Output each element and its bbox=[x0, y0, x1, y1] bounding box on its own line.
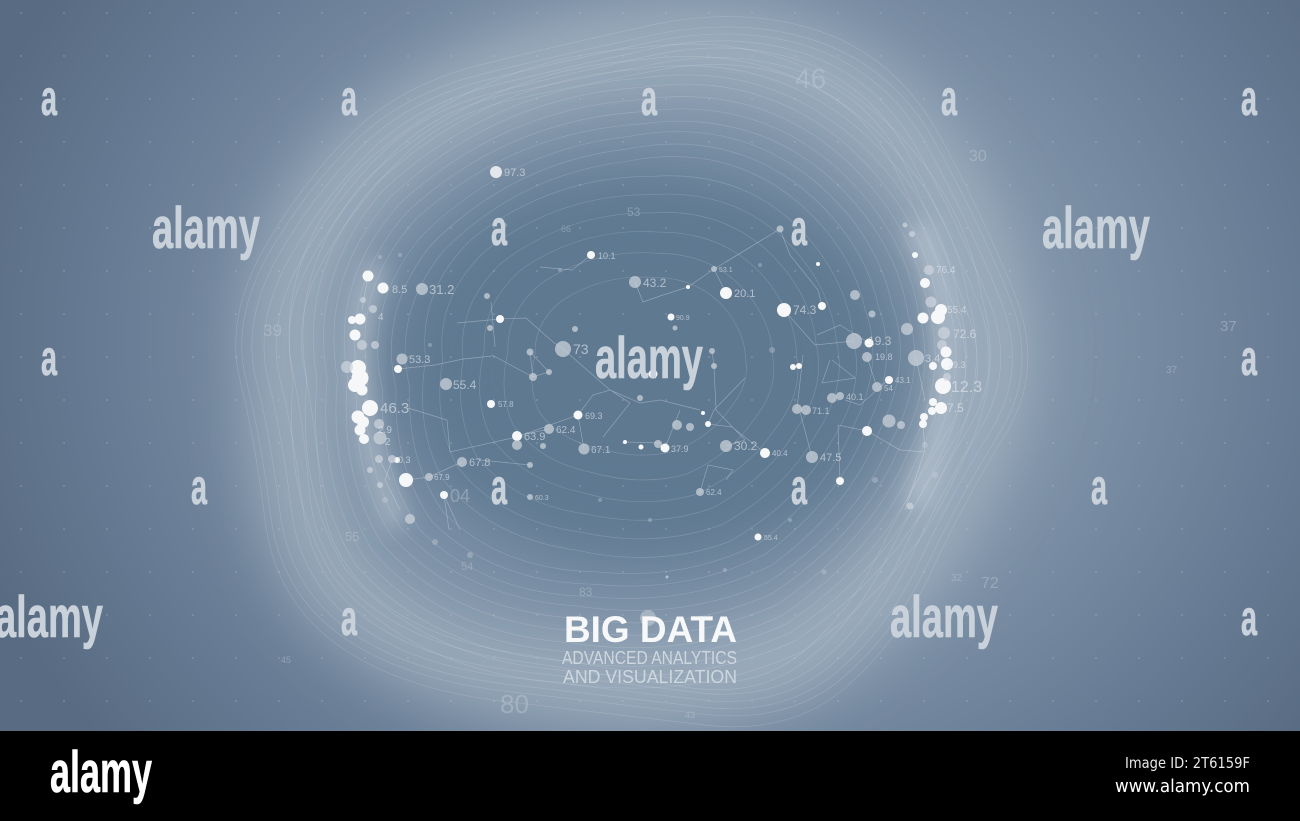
watermarks: a bbox=[1241, 70, 1258, 126]
watermarks: a bbox=[1241, 330, 1258, 386]
right arc node cluster: 72.6 bbox=[953, 327, 977, 341]
watermarks: alamy bbox=[1042, 196, 1150, 261]
faint floating numbers: 04 bbox=[450, 486, 470, 506]
contour lines bbox=[236, 16, 1028, 727]
left arc node cluster bbox=[341, 253, 411, 503]
right arc node cluster: 12.3 bbox=[951, 379, 982, 396]
watermarks bbox=[0, 70, 1258, 650]
central data nodes with values: 57.8 bbox=[498, 400, 514, 409]
central data nodes with values: 30.2 bbox=[734, 439, 758, 453]
subtitle: AND VISUALIZATION bbox=[563, 667, 737, 687]
right arc node cluster: 55.4 bbox=[947, 305, 967, 316]
watermarks: a bbox=[1241, 590, 1258, 646]
faint floating numbers: 53 bbox=[627, 205, 641, 219]
left arc node cluster: 2.9 bbox=[378, 425, 392, 436]
central data nodes with values: 40.4 bbox=[772, 449, 788, 458]
central data nodes with values: 63.9 bbox=[524, 431, 545, 443]
central data nodes with values: 19.8 bbox=[875, 352, 893, 362]
right arc node cluster: 7.5 bbox=[947, 401, 964, 415]
faint floating numbers: 43 bbox=[685, 710, 695, 720]
faint floating numbers: 45 bbox=[281, 655, 291, 665]
faint floating numbers: 66 bbox=[561, 224, 571, 234]
central data nodes with values: 60.3 bbox=[535, 495, 549, 502]
watermarks: a bbox=[491, 459, 508, 515]
central data nodes with values: 43.2 bbox=[643, 276, 667, 290]
left arc node cluster: 0.3 bbox=[398, 455, 411, 465]
central data nodes with values bbox=[394, 166, 940, 578]
watermarks: alamy bbox=[152, 196, 260, 261]
central data nodes with values: 53.3 bbox=[409, 354, 430, 366]
central data nodes with values: 71.1 bbox=[812, 406, 830, 416]
bright glowing ring bbox=[289, 47, 990, 685]
subtitle: ADVANCED ANALYTICS bbox=[562, 648, 737, 668]
central data nodes with values: 3.4 bbox=[925, 353, 940, 365]
watermarks: a bbox=[191, 459, 208, 515]
central data nodes with values: 90.9 bbox=[676, 315, 690, 322]
footer bar bbox=[0, 731, 1300, 821]
faint floating numbers: 30 bbox=[969, 148, 987, 165]
central data nodes with values: 97.3 bbox=[504, 167, 525, 179]
faint floating numbers bbox=[263, 63, 1237, 720]
central data nodes with values: 20.1 bbox=[734, 288, 755, 300]
left arc node cluster: 4 bbox=[378, 312, 384, 323]
faint floating numbers: 46 bbox=[795, 63, 826, 94]
faint floating numbers: 37 bbox=[1220, 318, 1237, 335]
subtitle bbox=[562, 648, 737, 687]
watermarks: a bbox=[941, 70, 958, 126]
central data nodes with values: 10.1 bbox=[598, 251, 616, 261]
left arc node cluster: 2 bbox=[385, 437, 391, 448]
central data nodes with values: 67.9 bbox=[434, 473, 450, 482]
central data nodes with values: 47.5 bbox=[820, 452, 841, 464]
footer bar: www.alamy.com bbox=[1115, 776, 1250, 797]
faint floating numbers: 55 bbox=[345, 529, 359, 544]
central data nodes with values: 53.1 bbox=[719, 267, 733, 274]
central data nodes with values: 40.1 bbox=[846, 392, 864, 402]
central data nodes with values: 54 bbox=[884, 384, 893, 393]
central data nodes with values: 37.9 bbox=[671, 444, 689, 454]
right arc node cluster: 29.3 bbox=[948, 360, 966, 370]
central data nodes with values: 55.4 bbox=[764, 535, 778, 542]
footer bar: alamy bbox=[50, 740, 152, 805]
footer bar: Image ID: 2T6159F bbox=[1125, 754, 1250, 772]
central data nodes with values: 43.1 bbox=[895, 376, 911, 385]
central data nodes with values: 55.4 bbox=[453, 378, 477, 392]
faint floating numbers: 80 bbox=[500, 689, 529, 719]
central data nodes with values: 62.4 bbox=[706, 488, 722, 497]
faint floating numbers: 83 bbox=[579, 585, 593, 599]
central data nodes with values: 67.1 bbox=[591, 445, 611, 456]
right arc node cluster: 76.4 bbox=[936, 265, 956, 276]
central data nodes with values: 67.8 bbox=[469, 457, 490, 469]
watermarks: a bbox=[41, 330, 58, 386]
central data nodes with values: 73 bbox=[573, 341, 589, 357]
left arc node cluster: 46.3 bbox=[380, 400, 409, 417]
faint floating numbers: 39 bbox=[263, 321, 282, 340]
watermarks: a bbox=[791, 459, 808, 515]
title: BIG DATA: BIG DATA bbox=[564, 609, 737, 650]
central data nodes with values: 62.4 bbox=[556, 425, 576, 436]
faint floating numbers: 54 bbox=[461, 561, 473, 573]
watermarks: a bbox=[341, 590, 358, 646]
faint floating numbers: 72 bbox=[981, 575, 999, 592]
watermarks: a bbox=[491, 200, 508, 256]
watermarks: a bbox=[791, 200, 808, 256]
faint floating numbers: 37 bbox=[1166, 365, 1178, 376]
central data nodes with values: 31.2 bbox=[429, 282, 454, 297]
central data nodes with values: 69.3 bbox=[585, 411, 603, 421]
watermarks: a bbox=[1091, 459, 1108, 515]
watermarks: a bbox=[341, 70, 358, 126]
left arc node cluster: 8.5 bbox=[392, 284, 407, 296]
watermarks: a bbox=[41, 70, 58, 126]
watermarks: alamy bbox=[595, 326, 703, 391]
central data nodes with values: 74.3 bbox=[793, 303, 817, 317]
network edges bbox=[362, 229, 925, 530]
faint floating numbers: 32 bbox=[951, 573, 963, 584]
central data nodes with values: 19.3 bbox=[868, 334, 892, 348]
watermarks: a bbox=[641, 70, 658, 126]
watermarks: alamy bbox=[890, 585, 998, 650]
right arc node cluster bbox=[902, 222, 982, 510]
